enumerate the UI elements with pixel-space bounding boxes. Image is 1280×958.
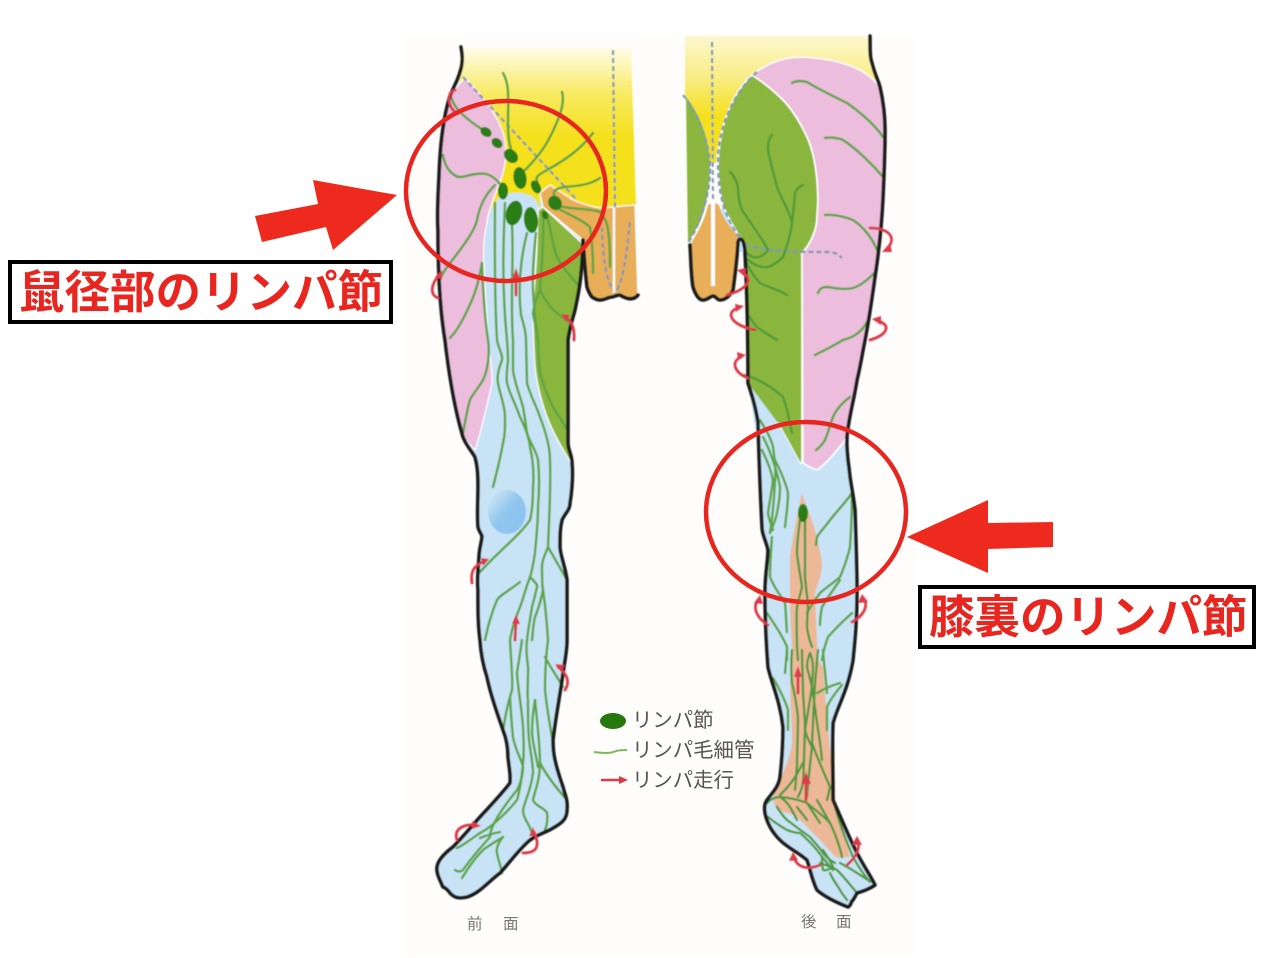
red arrows back bbox=[727, 228, 892, 868]
region: blue knee wedge over green bbox=[748, 383, 800, 463]
legend: lymph node: リンパ節 bbox=[632, 709, 714, 732]
legend bbox=[594, 709, 754, 792]
caption: back view second character: 面 bbox=[836, 914, 852, 931]
big red arrow: back of knee bbox=[907, 500, 1053, 573]
region: orange scrotum area bbox=[690, 202, 742, 300]
region: light blue lower leg silhouette bbox=[690, 36, 885, 907]
caption: back view: 後 bbox=[801, 913, 817, 931]
red circle: groin bbox=[406, 101, 606, 281]
outline front leg bbox=[437, 47, 638, 898]
icon: knee cap bbox=[488, 490, 526, 534]
panel: scanned illustration background bbox=[404, 36, 916, 956]
figure: front view of leg bbox=[432, 47, 638, 898]
dashed boundaries front bbox=[463, 50, 630, 293]
region: green buttock and thigh bbox=[718, 75, 818, 463]
region: left green buttock bbox=[686, 97, 710, 243]
center white line bbox=[711, 163, 715, 286]
caption: front view second character: 面 bbox=[503, 916, 519, 933]
red circle: back of knee bbox=[706, 422, 906, 602]
figure: back view of leg bbox=[683, 36, 892, 907]
region: yellow buttock base bbox=[685, 36, 880, 163]
big red arrow: groin bbox=[255, 180, 397, 250]
region: orange calf bbox=[773, 493, 850, 858]
legend: lymph flow: リンパ走行 bbox=[632, 769, 734, 792]
outline back leg bbox=[690, 36, 885, 907]
region: light blue leg silhouette bbox=[437, 47, 583, 898]
region: pink outer thigh bbox=[438, 78, 506, 450]
label box: groin lymph nodes: 鼠径部のリンパ節 bbox=[19, 267, 383, 318]
legend: lymph node bbox=[600, 709, 714, 732]
region: pink buttock and thigh bbox=[752, 57, 885, 470]
lymph nodes front bbox=[479, 125, 564, 234]
lymph capillaries front bbox=[438, 73, 610, 878]
dashed boundaries back bbox=[683, 42, 842, 258]
lymph node back bbox=[798, 504, 808, 522]
region: orange groin bbox=[540, 185, 638, 300]
legend: lymph capillary: リンパ毛細管 bbox=[632, 739, 754, 762]
label box: popliteal lymph nodes: 膝裏のリンパ節 bbox=[929, 592, 1248, 643]
region: green inner thigh bbox=[533, 207, 582, 463]
caption: front view: 前 bbox=[467, 915, 483, 933]
lymph capillaries back bbox=[730, 81, 883, 900]
red arrows front bbox=[432, 90, 574, 853]
region: yellow lower abdomen bbox=[458, 47, 636, 223]
